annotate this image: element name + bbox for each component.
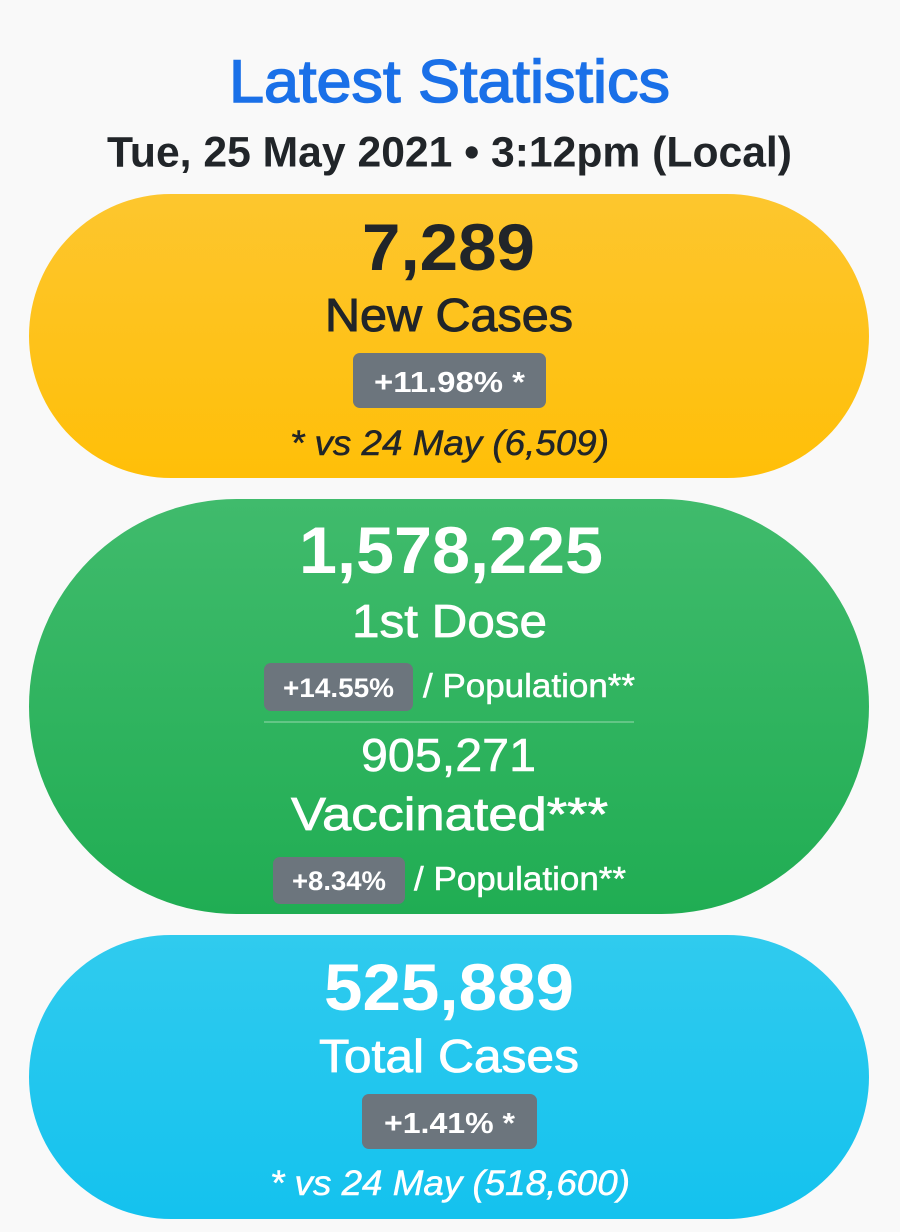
date subtitle: Tue, 25 May 2021 • 3:12pm (Local) <box>107 128 792 176</box>
new cases footnote: * vs 24 May (6,509) <box>290 424 609 463</box>
vaccinated badge <box>273 857 405 904</box>
first dose label: 1st Dose <box>352 595 547 647</box>
vaccinated badge: +8.34% <box>292 866 386 896</box>
new cases label: New Cases <box>325 289 573 341</box>
new cases change badge: +11.98% * <box>374 367 526 399</box>
total cases footnote: * vs 24 May (518,600) <box>270 1164 630 1203</box>
panel: total cases <box>29 935 869 1219</box>
title: Latest Statistics <box>229 48 670 115</box>
vaccinated population note: / Population** <box>414 860 626 897</box>
first dose population note: / Population** <box>423 667 635 704</box>
total cases number: 525,889 <box>324 950 574 1024</box>
total cases label: Total Cases <box>319 1030 579 1082</box>
first dose badge <box>264 663 413 711</box>
panel: new cases <box>29 194 869 478</box>
vaccinated number: 905,271 <box>361 729 536 781</box>
vaccinated label: Vaccinated*** <box>291 788 608 840</box>
total cases change badge: +1.41% * <box>384 1108 516 1140</box>
first dose number: 1,578,225 <box>299 513 603 587</box>
new cases number: 7,289 <box>362 210 535 284</box>
panel: vaccination <box>29 499 869 914</box>
first dose badge: +14.55% <box>283 673 394 703</box>
total cases change badge <box>362 1094 537 1149</box>
new cases change badge <box>353 353 546 408</box>
